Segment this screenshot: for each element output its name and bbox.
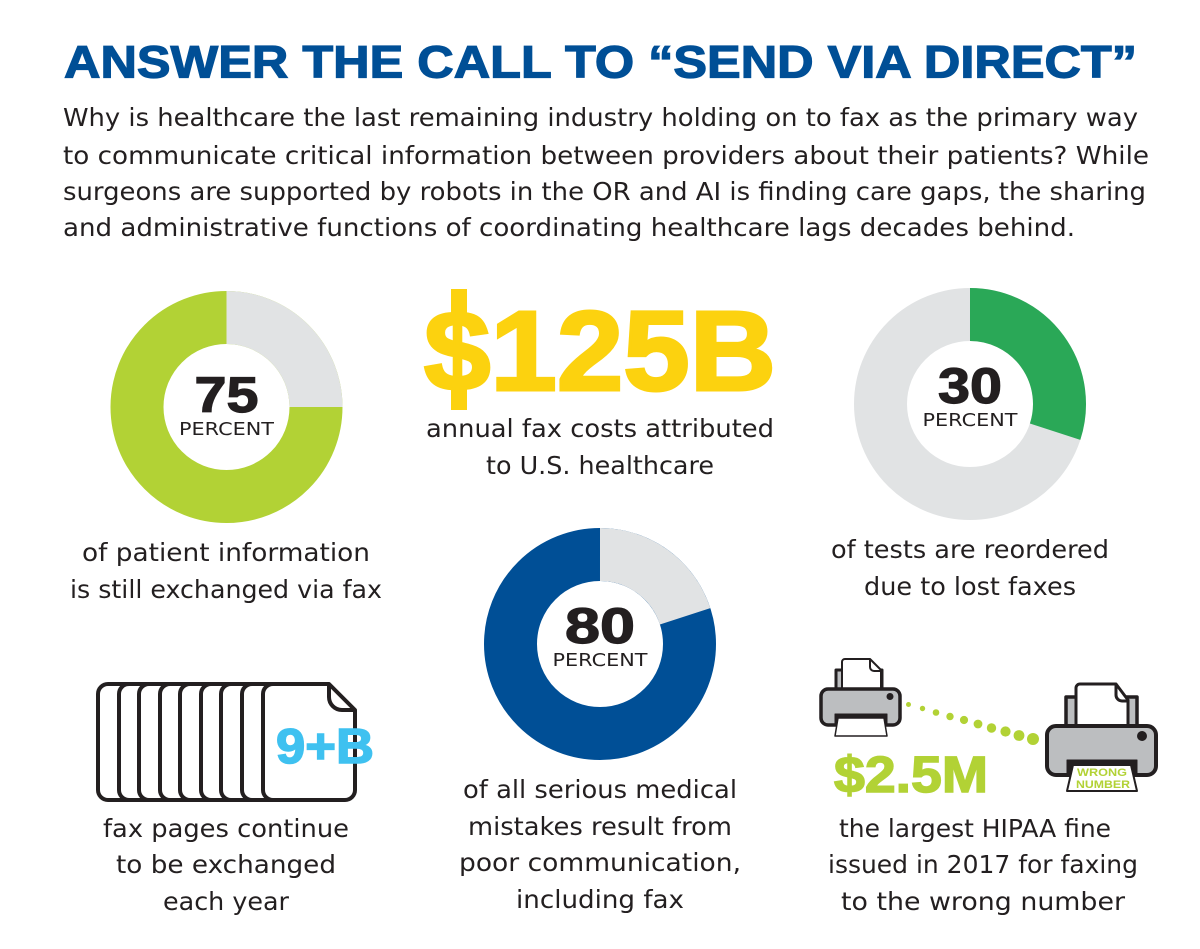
caption: 80 percent	[459, 775, 741, 914]
caption: 30 percent	[831, 535, 1109, 601]
caption: 75 percent	[70, 538, 382, 604]
value: 30 percent: 30	[938, 358, 1002, 414]
caption: 80 percent: including fax	[516, 885, 684, 914]
value: 30 percent	[922, 358, 1019, 431]
caption: 9+B: fax pages continue	[103, 814, 349, 843]
value: 75 percent	[179, 367, 275, 440]
value: 80 percent: 80	[565, 598, 635, 654]
label: wrong number: NUMBER	[1076, 779, 1130, 791]
caption: 30 percent: of tests are reordered	[831, 535, 1109, 564]
intro text: to communicate critical information between providers about their patients? While	[63, 141, 1149, 170]
intro text: surgeons are supported by robots in the OR and AI is finding care gaps, the sharing	[63, 177, 1146, 206]
value: 80 percent	[552, 598, 649, 671]
caption: 9+B: to be exchanged	[116, 850, 336, 879]
caption: $2.5M: issued in 2017 for faxing	[828, 850, 1138, 879]
big number: $125B: $125B	[424, 288, 776, 414]
caption: $125B: annual fax costs attributed	[426, 414, 774, 443]
caption: 80 percent: of all serious medical	[463, 775, 737, 804]
panel: $125B	[424, 288, 776, 480]
intro text	[63, 103, 1149, 242]
caption: 80 percent: poor communication,	[459, 848, 741, 877]
label: wrong number	[1076, 767, 1130, 791]
intro text: Why is healthcare the last remaining industry holding on to fax as the primary way	[63, 103, 1138, 132]
donut chart: 30 percent	[880, 314, 1060, 494]
panel: $2.5M fine	[821, 659, 1156, 916]
panel: 30 percent	[831, 314, 1109, 601]
value: 80 percent: PERCENT	[552, 650, 649, 671]
caption: $125B: to U.S. healthcare	[486, 451, 714, 480]
label: wrong number: WRONG	[1077, 767, 1127, 779]
panel: 9+B pages	[98, 684, 374, 916]
caption: $2.5M: to the wrong number	[841, 887, 1126, 916]
panel: 75 percent	[70, 318, 382, 604]
icon: stack of pages	[98, 684, 355, 800]
caption: 30 percent: due to lost faxes	[864, 572, 1076, 601]
caption: 75 percent: of patient information	[82, 538, 370, 567]
caption: 80 percent: mistakes result from	[468, 812, 732, 841]
caption: $2.5M: the largest HIPAA fine	[839, 814, 1111, 843]
panel: 80 percent	[459, 554, 741, 914]
caption: 9+B: each year	[163, 887, 290, 916]
value: 75 percent: PERCENT	[179, 419, 275, 440]
title: ANSWER THE CALL TO “SEND VIA DIRECT”	[64, 36, 1137, 88]
caption: 9+B	[103, 814, 349, 916]
caption: 75 percent: is still exchanged via fax	[70, 575, 382, 604]
caption: $2.5M	[828, 814, 1138, 916]
icon: receiving printer	[1047, 684, 1156, 791]
donut chart: 75 percent	[137, 318, 316, 496]
value: $2.5M: $2.5M	[834, 746, 988, 803]
value: 9+B: 9+B	[276, 720, 374, 774]
icon: sending printer	[821, 659, 900, 736]
donut chart: 80 percent	[510, 554, 690, 734]
dotted line	[906, 702, 1039, 745]
intro text: and administrative functions of coordinating healthcare lags decades behind.	[63, 213, 1075, 242]
caption: $125B	[426, 414, 774, 480]
value: 75 percent: 75	[194, 367, 258, 423]
value: 30 percent: PERCENT	[922, 410, 1019, 431]
